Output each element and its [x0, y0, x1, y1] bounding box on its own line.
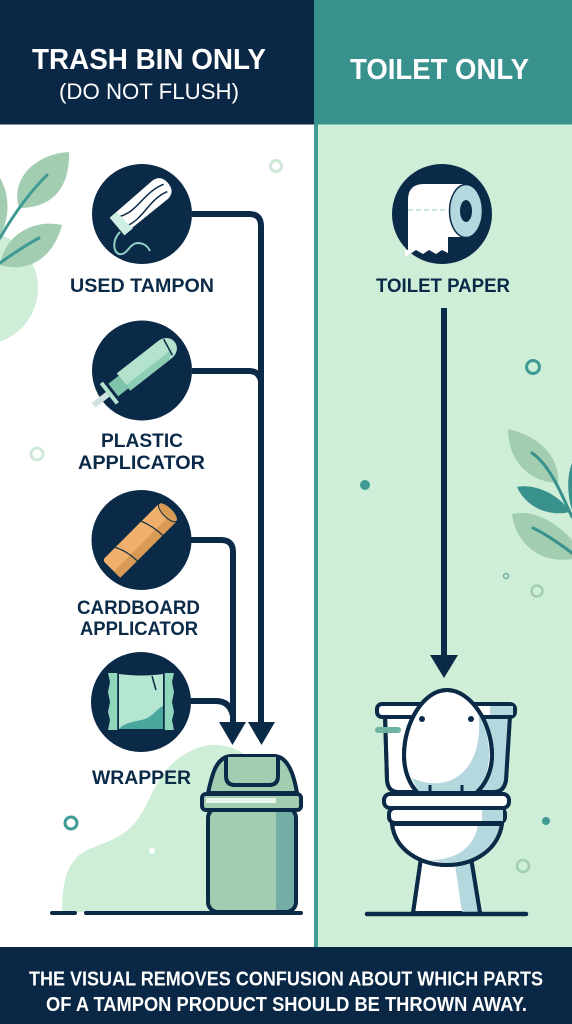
footer caption — [0, 947, 572, 1024]
label: plastic applicator — [78, 431, 205, 474]
label: cardboard applicator — [77, 598, 200, 640]
toilet tank — [385, 715, 510, 792]
arrow: toilet paper to toilet — [430, 308, 458, 678]
panel: toilet — [314, 124, 572, 947]
footer caption: OF A TAMPON PRODUCT SHOULD BE THROWN AWAY. — [46, 994, 527, 1016]
icon: used tampon — [92, 164, 192, 264]
toilet lid — [404, 690, 492, 793]
toilet bowl — [392, 824, 502, 865]
header: toilet only — [314, 0, 572, 124]
header: trash bin only: (DO NOT FLUSH) — [59, 79, 239, 104]
toilet handle — [378, 727, 398, 733]
label: plastic applicator: APPLICATOR — [78, 453, 205, 474]
label: used tampon: USED TAMPON — [70, 276, 214, 297]
label: toilet paper: TOILET PAPER — [376, 276, 510, 297]
header: trash bin only — [0, 0, 314, 124]
header: toilet only: TOILET ONLY — [350, 54, 529, 86]
decorative leaves left — [0, 152, 69, 345]
icon: toilet paper — [392, 164, 492, 264]
icon: wrapper — [91, 652, 191, 752]
label: wrapper: WRAPPER — [92, 768, 191, 789]
decorative dots right — [360, 360, 550, 872]
icon: cardboard applicator — [92, 490, 192, 590]
icon: toilet — [377, 690, 515, 913]
decorative leaves right — [508, 429, 572, 560]
connector lines to trash — [190, 214, 275, 745]
toilet rims — [389, 808, 505, 823]
panel: trash bin — [0, 124, 314, 947]
label: cardboard applicator: APPLICATOR — [80, 619, 198, 640]
background blob — [62, 745, 250, 912]
label: cardboard applicator: CARDBOARD — [77, 598, 200, 619]
header: trash bin only: TRASH BIN ONLY — [32, 44, 266, 76]
icon: trash bin — [202, 756, 301, 912]
label: plastic applicator: PLASTIC — [101, 431, 183, 452]
ground line: toilet — [367, 912, 526, 916]
toilet pedestal — [413, 858, 480, 913]
ground line: trash — [52, 911, 301, 915]
icon: plastic applicator — [86, 320, 192, 420]
decorative rings left — [31, 160, 282, 829]
